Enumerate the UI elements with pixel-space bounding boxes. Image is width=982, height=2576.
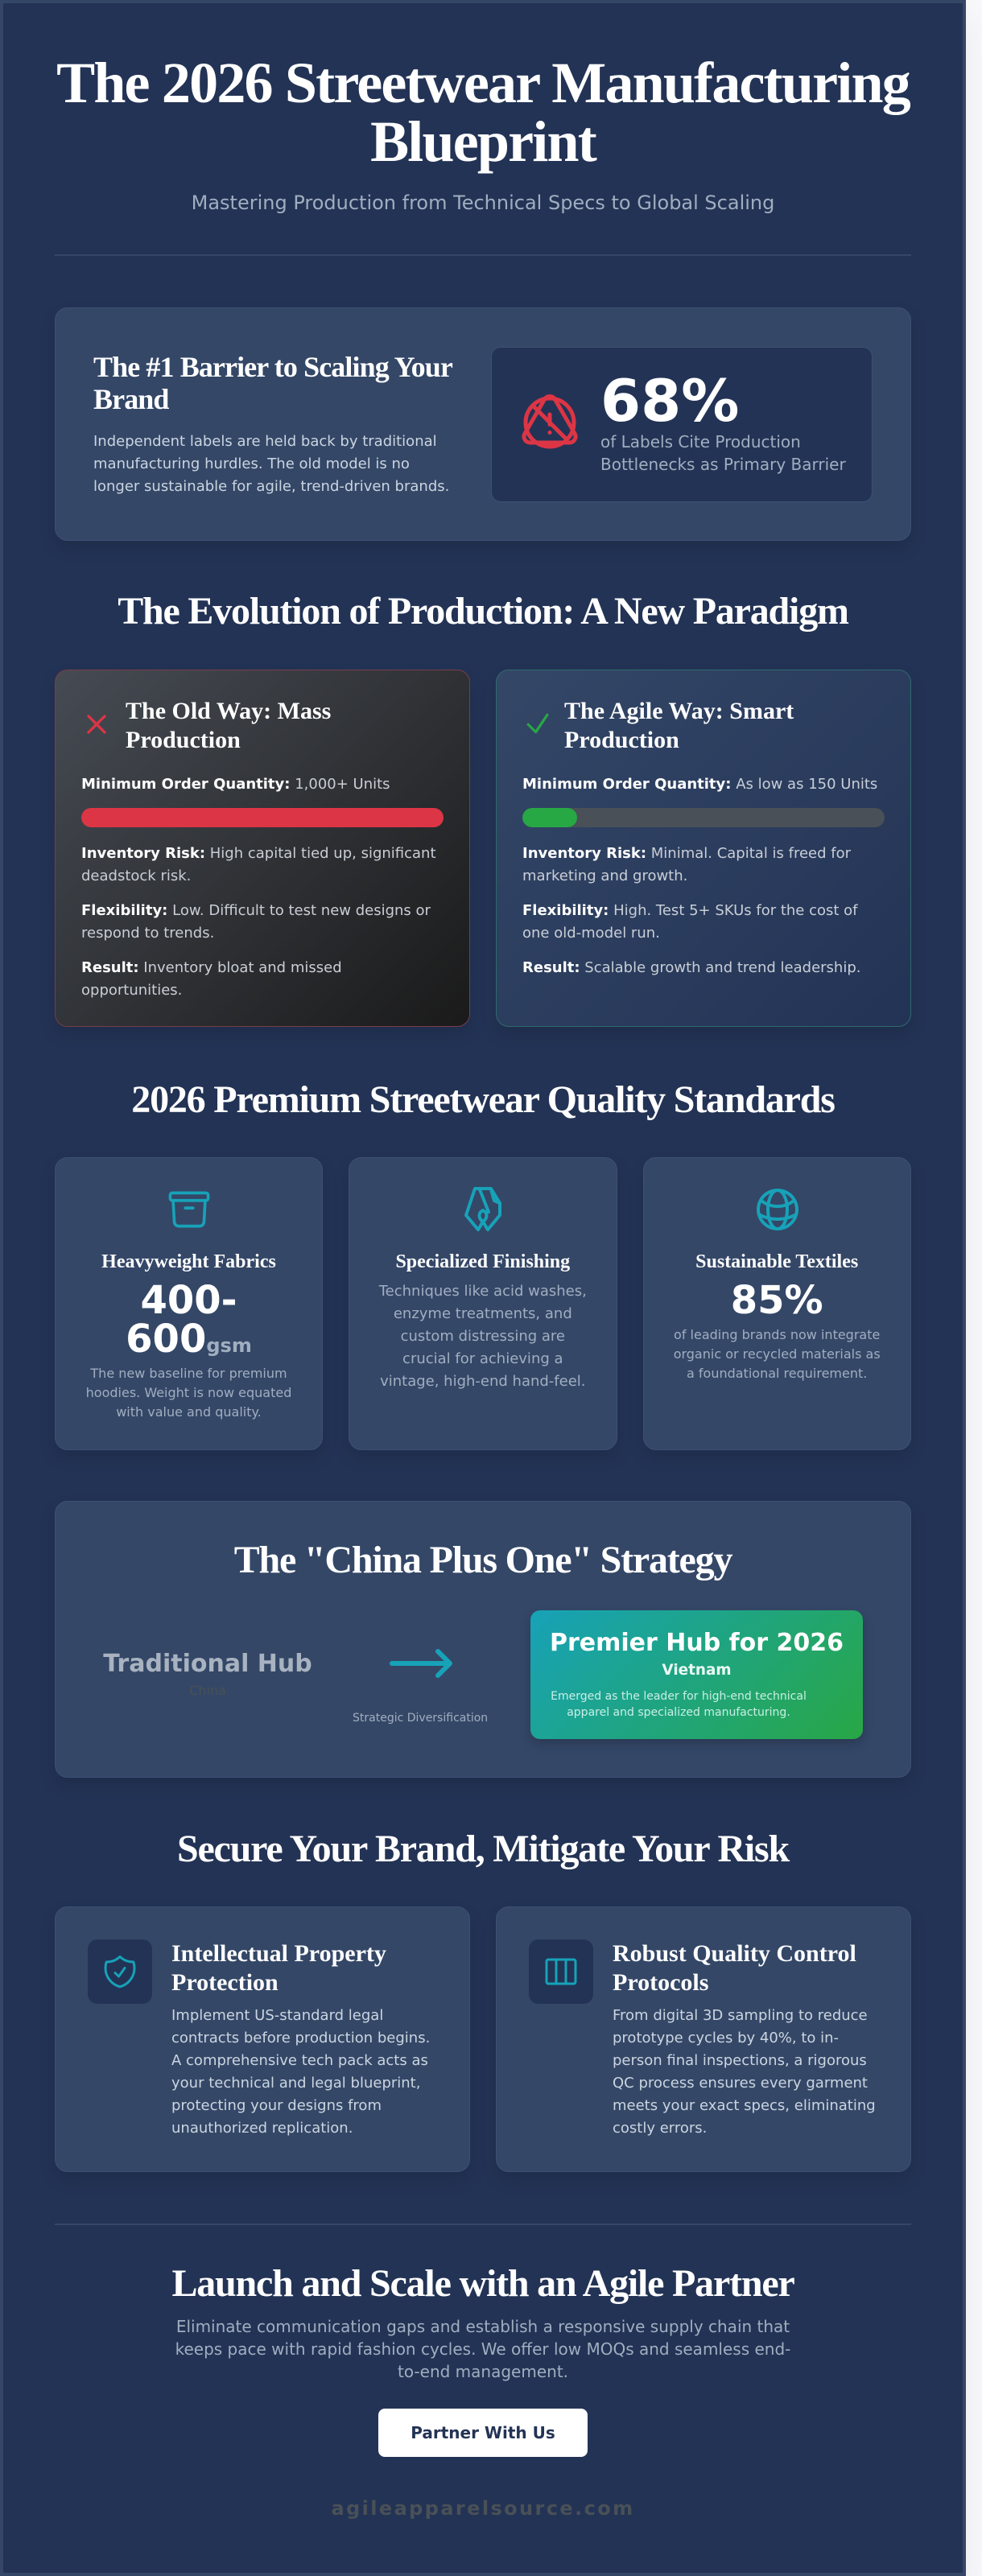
QC heading: Protocols xyxy=(613,1969,708,1996)
CTA description: to-end management. xyxy=(398,2362,568,2381)
premier hub description: Emerged as the leader for high-end technical xyxy=(551,1690,807,1703)
icon tile: shield xyxy=(88,1939,152,2004)
arrow caption: Strategic Diversification xyxy=(353,1712,488,1725)
old way inventory risk: deadstock risk. xyxy=(81,868,191,884)
fabrics stat: 600gsm xyxy=(126,1317,252,1362)
strategy heading: The "China Plus One" Strategy xyxy=(234,1539,732,1581)
IP heading: Intellectual Property xyxy=(171,1940,386,1967)
barrier description: manufacturing hurdles. The old model is no xyxy=(93,455,410,472)
panel: specialized finishing xyxy=(349,1157,617,1450)
old way heading: Production xyxy=(126,727,241,753)
heading: launch and scale: Launch and Scale with an Agile Partner xyxy=(171,2262,794,2305)
icon: pen nib xyxy=(464,1187,501,1231)
title: The 2026 Streetwear Manufacturing xyxy=(56,51,910,115)
title: Blueprint xyxy=(370,109,596,174)
textiles description: organic or recycled materials as xyxy=(674,1346,881,1362)
agile way flexibility: Flexibility: High. Test 5+ SKUs for the cost of xyxy=(522,902,858,919)
heading: quality standards: 2026 Premium Streetwear Quality Standards xyxy=(131,1078,835,1121)
textiles stat: 85% xyxy=(731,1278,823,1323)
QC description xyxy=(613,2007,876,2137)
finishing description: custom distressing are xyxy=(401,1328,565,1345)
panel: quality control xyxy=(496,1906,911,2172)
old way flexibility: respond to trends. xyxy=(81,924,214,942)
heading: secure your brand: Secure Your Brand, Mitigate Your Risk xyxy=(177,1828,789,1870)
barrier description: longer sustainable for agile, trend-driven brands. xyxy=(93,478,449,495)
stat caption xyxy=(600,432,846,474)
QC description: costly errors. xyxy=(613,2120,707,2137)
barrier description: Independent labels are held back by traditional xyxy=(93,433,437,450)
QC heading xyxy=(613,1940,856,1996)
barrier heading xyxy=(93,351,452,415)
icon tile: columns xyxy=(529,1939,593,2004)
icon: check mark xyxy=(526,713,549,734)
icon: warning blocked xyxy=(522,394,578,449)
IP heading: Protection xyxy=(171,1969,279,1996)
old way result: opportunities. xyxy=(81,982,182,998)
heading: evolution of production: The Evolution of Production: A New Paradigm xyxy=(118,590,848,633)
stat caption: of Labels Cite Production xyxy=(600,432,801,451)
premier hub country: Vietnam xyxy=(662,1662,732,1679)
fabrics stat xyxy=(126,1278,252,1362)
premier hub description xyxy=(551,1690,807,1719)
barrier description xyxy=(93,433,449,495)
stat box: 68% xyxy=(491,347,873,502)
old way result: Result: Inventory bloat and missed xyxy=(81,959,342,976)
agile way MOQ: Minimum Order Quantity: As low as 150 Units xyxy=(522,776,877,793)
traditional hub label: Traditional Hub xyxy=(103,1650,312,1678)
stat caption: Bottlenecks as Primary Barrier xyxy=(600,455,846,474)
IP description: contracts before production begins. xyxy=(171,2030,430,2046)
fabrics heading: Heavyweight Fabrics xyxy=(101,1251,276,1272)
agile way heading xyxy=(564,698,794,753)
subtitle: Mastering Production from Technical Specs to Global Scaling xyxy=(192,192,774,214)
QC heading: Robust Quality Control xyxy=(613,1940,856,1967)
QC description: meets your exact specs, eliminating xyxy=(613,2097,876,2114)
QC description: prototype cycles by 40%, to in- xyxy=(613,2030,839,2046)
finishing description: enzyme treatments, and xyxy=(394,1305,572,1322)
panel: the #1 barrier xyxy=(55,307,911,541)
agile way flexibility: one old-model run. xyxy=(522,924,660,942)
CTA description: Eliminate communication gaps and establish a responsive supply chain that xyxy=(176,2317,790,2336)
textiles description xyxy=(674,1327,881,1381)
premier hub description: apparel and specialized manufacturing. xyxy=(567,1706,790,1719)
agile way inventory risk: Inventory Risk: Minimal. Capital is freed for xyxy=(522,845,851,862)
footer url: agileapparelsource.com xyxy=(331,2497,635,2520)
panel: the old way xyxy=(55,670,470,1027)
icon: shield check xyxy=(105,1956,135,1988)
IP description: unauthorized replication. xyxy=(171,2120,353,2137)
textiles description: a foundational requirement. xyxy=(687,1366,867,1381)
textiles description: of leading brands now integrate xyxy=(674,1327,880,1342)
QC description: person final inspections, a rigorous xyxy=(613,2052,867,2069)
agile way heading: Production xyxy=(564,727,679,753)
old way heading: The Old Way: Mass xyxy=(126,698,331,724)
old way result xyxy=(81,959,342,998)
icon: x mark xyxy=(87,715,106,734)
CTA button xyxy=(378,2409,588,2457)
old way flexibility: Flexibility: Low. Difficult to test new designs or xyxy=(81,902,431,919)
MOQ bar: 100% xyxy=(81,808,444,827)
QC description: QC process ensures every garment xyxy=(613,2075,868,2092)
agile way result: Result: Scalable growth and trend leadership. xyxy=(522,959,860,976)
IP description: your technical and legal blueprint, xyxy=(171,2075,420,2092)
MOQ bar: 15% xyxy=(522,808,885,827)
panel: china plus one strategy xyxy=(55,1501,911,1778)
arrow: diversification xyxy=(390,1649,452,1678)
IP description: protecting your designs from xyxy=(171,2097,382,2114)
china label: China xyxy=(189,1683,226,1698)
IP description: Implement US-standard legal xyxy=(171,2007,383,2024)
premier hub title: Premier Hub for 2026 xyxy=(550,1629,844,1657)
CTA description xyxy=(175,2317,790,2381)
fabrics description xyxy=(86,1366,291,1420)
QC description: From digital 3D sampling to reduce xyxy=(613,2007,868,2024)
old way flexibility xyxy=(81,902,431,942)
panel: sustainable textiles xyxy=(643,1157,911,1450)
finishing description xyxy=(378,1283,587,1390)
old way MOQ: Minimum Order Quantity: 1,000+ Units xyxy=(81,776,390,793)
IP description xyxy=(171,2007,430,2137)
fabrics description: The new baseline for premium xyxy=(90,1366,287,1381)
panel: the agile way xyxy=(496,670,911,1027)
barrier heading: Brand xyxy=(93,383,169,415)
IP description: A comprehensive tech pack acts as xyxy=(171,2052,428,2069)
title xyxy=(56,51,911,174)
textiles heading: Sustainable Textiles xyxy=(695,1251,858,1272)
stat number: 68% xyxy=(600,367,739,435)
CTA description: keeps pace with rapid fashion cycles. We offer low MOQs and seamless end- xyxy=(175,2339,790,2359)
panel: heavyweight fabrics xyxy=(55,1157,323,1450)
agile way inventory risk: marketing and growth. xyxy=(522,868,687,884)
finishing description: vintage, high-end hand-feel. xyxy=(380,1373,586,1390)
traditional hub xyxy=(103,1650,312,1698)
barrier heading: The #1 Barrier to Scaling Your xyxy=(93,351,452,383)
panel: intellectual property xyxy=(55,1906,470,2172)
old way inventory risk: Inventory Risk: High capital tied up, significant xyxy=(81,845,436,862)
old way heading xyxy=(126,698,331,753)
icon: globe xyxy=(757,1189,798,1230)
finishing description: crucial for achieving a xyxy=(402,1350,563,1367)
icon: archive box xyxy=(169,1191,209,1228)
fabrics stat: 400- xyxy=(140,1278,237,1323)
premier hub card xyxy=(530,1610,863,1739)
agile way heading: The Agile Way: Smart xyxy=(564,698,794,724)
fabrics description: with value and quality. xyxy=(116,1404,262,1420)
agile way flexibility xyxy=(522,902,858,942)
old way inventory risk xyxy=(81,845,436,884)
finishing description: Techniques like acid washes, xyxy=(379,1283,587,1300)
icon: view columns xyxy=(546,1959,576,1985)
IP heading xyxy=(171,1940,386,1996)
agile way inventory risk xyxy=(522,845,851,884)
fabrics description: hoodies. Weight is now equated xyxy=(86,1385,291,1400)
finishing heading: Specialized Finishing xyxy=(395,1251,570,1272)
CTA button: Partner With Us xyxy=(411,2423,555,2442)
